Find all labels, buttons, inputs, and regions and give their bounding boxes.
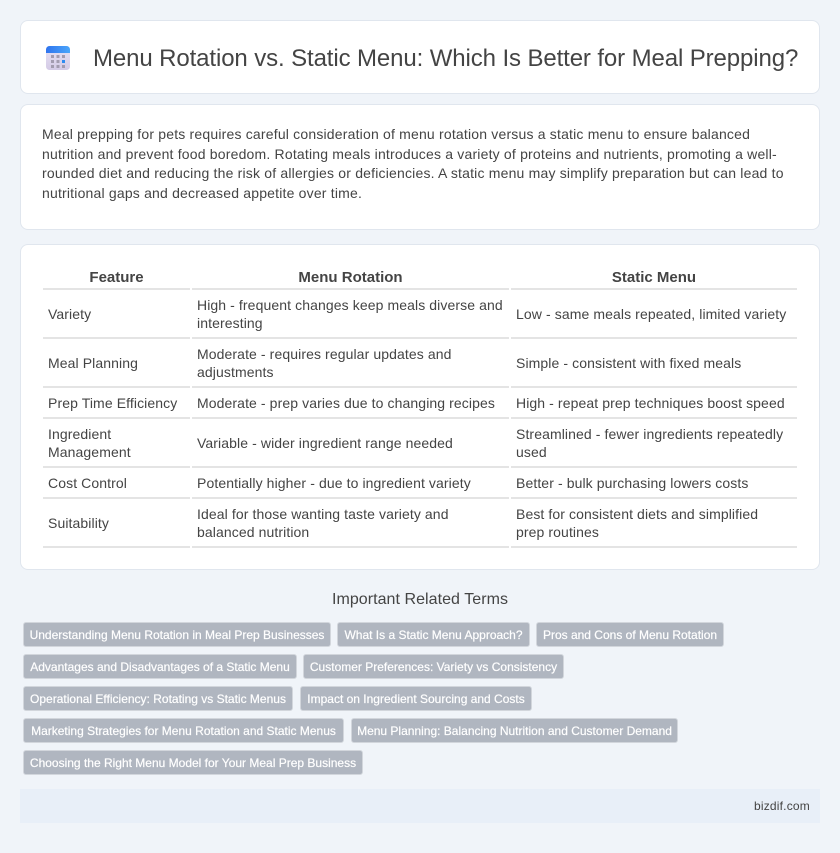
row: meal planning: adjustments — [197, 364, 274, 380]
row: prep time efficiency: High - repeat prep techniques boost speed — [516, 395, 785, 411]
related terms tags: Understanding Menu Rotation in Meal Prep Businesses — [30, 628, 324, 642]
row: cost control: Cost Control — [48, 475, 127, 491]
row: prep time efficiency: Moderate - prep varies due to changing recipes — [197, 395, 495, 411]
footer source text: bizdif.com — [754, 799, 810, 813]
row: cost control — [48, 475, 748, 491]
row: suitability: Best for consistent diets and simplified — [516, 506, 758, 522]
row: meal planning: Simple - consistent with fixed meals — [516, 355, 741, 371]
table header: Feature — [89, 269, 144, 286]
table header: Menu Rotation — [298, 269, 403, 286]
title: Menu Rotation vs. Static Menu: Which Is Better for Meal Prepping? — [93, 45, 798, 72]
intro text: rounded diet and reducing the risk of allergies or deficiencies. A static menu may simplify preparation but can lead to — [42, 165, 784, 181]
related terms tags: Pros and Cons of Menu Rotation — [543, 628, 717, 642]
intro text: nutrition and prevent food boredom. Rotating meals introduces a variety of proteins and nutrients, promoting a well- — [42, 146, 777, 162]
related terms tags — [23, 622, 724, 775]
intro text — [42, 126, 784, 201]
intro text: Meal prepping for pets requires careful consideration of menu rotation versus a static menu to ensure balanced — [42, 126, 750, 142]
row: ingredient management: Streamlined - fewer ingredients repeatedly — [516, 426, 783, 442]
row: variety — [48, 297, 786, 331]
row: ingredient management — [48, 426, 784, 460]
row: suitability — [48, 506, 758, 540]
row: suitability: balanced nutrition — [197, 524, 309, 540]
related terms tags: Choosing the Right Menu Model for Your Meal Prep Business — [30, 756, 356, 770]
row: cost control: Potentially higher - due to ingredient variety — [197, 475, 471, 491]
row: ingredient management: used — [516, 444, 547, 460]
row: ingredient management: Variable - wider ingredient range needed — [197, 435, 453, 451]
row: variety: Low - same meals repeated, limited variety — [516, 306, 786, 322]
row: cost control: Better - bulk purchasing lowers costs — [516, 475, 748, 491]
related terms heading: Important Related Terms — [332, 591, 508, 608]
row: meal planning: Meal Planning — [48, 355, 138, 371]
comparison table panel — [20, 244, 820, 570]
intro text: nutritional gaps and decreased appetite over time. — [42, 184, 362, 200]
related terms tags: Operational Efficiency: Rotating vs Static Menus — [30, 692, 286, 706]
related terms tags: Customer Preferences: Variety vs Consistency — [310, 660, 557, 674]
row: ingredient management: Ingredient — [48, 426, 111, 442]
row: suitability: Ideal for those wanting taste variety and — [197, 506, 449, 522]
row: meal planning — [48, 346, 741, 380]
footer bar — [20, 789, 820, 823]
row: variety: Variety — [48, 306, 91, 322]
related terms tags: Advantages and Disadvantages of a Static Menu — [30, 660, 290, 674]
row: ingredient management: Management — [48, 444, 131, 460]
row: meal planning: Moderate - requires regular updates and — [197, 346, 452, 362]
row: suitability: prep routines — [516, 524, 599, 540]
header panel — [20, 20, 820, 94]
row: prep time efficiency: Prep Time Efficiency — [48, 395, 177, 411]
table header: Static Menu — [612, 269, 696, 286]
related terms tags: What Is a Static Menu Approach? — [344, 628, 523, 642]
related terms tags: Impact on Ingredient Sourcing and Costs — [307, 692, 525, 706]
related terms tags: Marketing Strategies for Menu Rotation and Static Menus — [31, 724, 336, 738]
row: suitability: Suitability — [48, 515, 109, 531]
table header — [89, 269, 696, 286]
row: variety: High - frequent changes keep meals diverse and — [197, 297, 503, 313]
icon: calendar — [46, 46, 70, 70]
row: variety: interesting — [197, 315, 263, 331]
intro panel — [20, 104, 820, 230]
related terms tags: Menu Planning: Balancing Nutrition and Customer Demand — [357, 724, 672, 738]
row: prep time efficiency — [48, 395, 785, 411]
